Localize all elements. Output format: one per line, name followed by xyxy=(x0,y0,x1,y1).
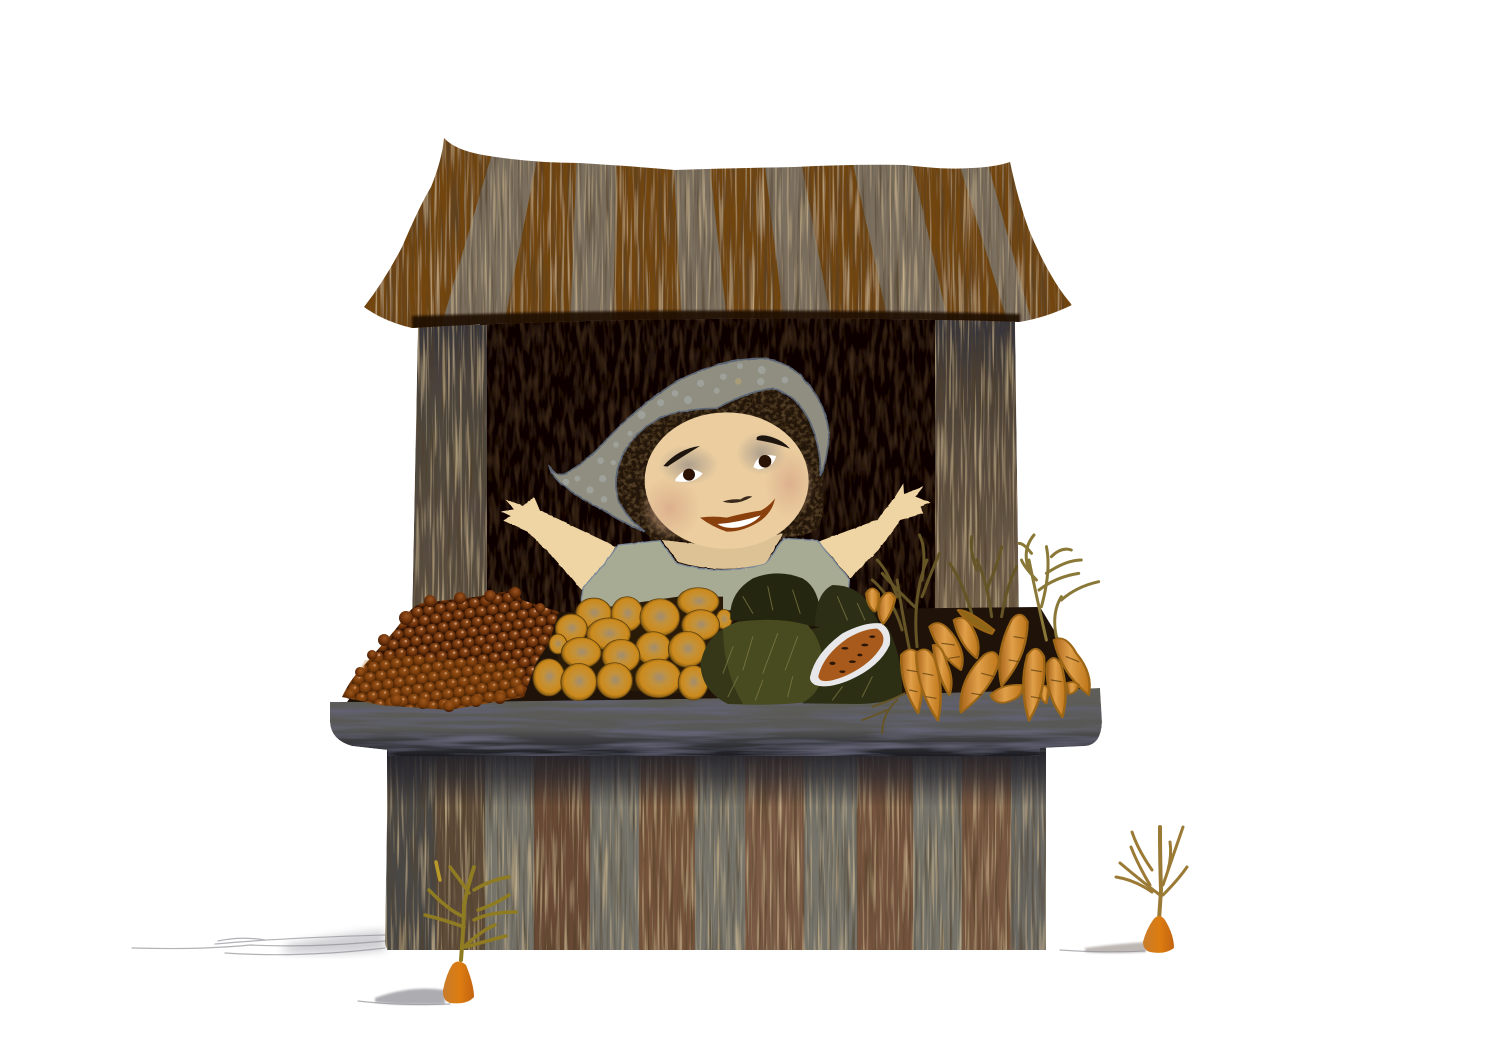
carrot greens xyxy=(862,535,1099,733)
left eye xyxy=(675,469,703,482)
wall top shadow xyxy=(387,745,1046,807)
roof stripes xyxy=(440,150,1034,330)
scarf dots xyxy=(563,363,788,503)
loose berries xyxy=(345,587,545,712)
headscarf xyxy=(548,358,829,532)
lower stall wall xyxy=(385,745,1046,950)
carrot leaves xyxy=(425,862,516,960)
right upper wall xyxy=(935,318,1019,625)
carrot bodies xyxy=(866,588,1090,721)
eyebrows xyxy=(663,446,700,467)
hair xyxy=(615,388,824,542)
left upper wall xyxy=(412,325,487,625)
pumpkin ribs xyxy=(723,587,872,700)
right dark lobe xyxy=(803,623,902,704)
orange fruit pile xyxy=(533,588,732,701)
cheeks xyxy=(640,477,700,540)
carrot root xyxy=(443,962,474,1003)
roof underside shadow xyxy=(410,308,1022,328)
right arm xyxy=(818,483,931,578)
pumpkins xyxy=(701,573,902,705)
teeth xyxy=(717,515,761,528)
berries xyxy=(342,587,559,712)
carrots on counter xyxy=(862,535,1099,733)
upper right lobe xyxy=(815,585,882,630)
left arm xyxy=(501,497,616,590)
nose xyxy=(723,496,752,503)
right ground carrot xyxy=(1116,827,1187,953)
left ground carrot xyxy=(425,862,516,1003)
counter back xyxy=(345,607,1095,705)
carrot root xyxy=(1143,916,1174,953)
woman vendor xyxy=(501,358,931,613)
carrot markings xyxy=(907,637,1079,698)
roof xyxy=(360,130,1080,334)
shirt xyxy=(579,538,849,613)
counter top xyxy=(330,688,1102,756)
stall interior xyxy=(480,314,940,632)
upper left lobe xyxy=(730,573,820,627)
illustration: vegetable market stall xyxy=(132,138,1189,1006)
face xyxy=(640,412,815,549)
right eye xyxy=(753,455,776,469)
ground shadows xyxy=(132,930,1146,1005)
big front lobe xyxy=(701,620,823,705)
eye shading xyxy=(658,445,718,485)
warm lower berry tint xyxy=(342,655,524,710)
carrot branches xyxy=(1116,827,1187,920)
base planks xyxy=(385,752,1046,950)
mouth xyxy=(700,498,775,532)
neck xyxy=(662,533,783,569)
cut slice xyxy=(810,623,890,686)
